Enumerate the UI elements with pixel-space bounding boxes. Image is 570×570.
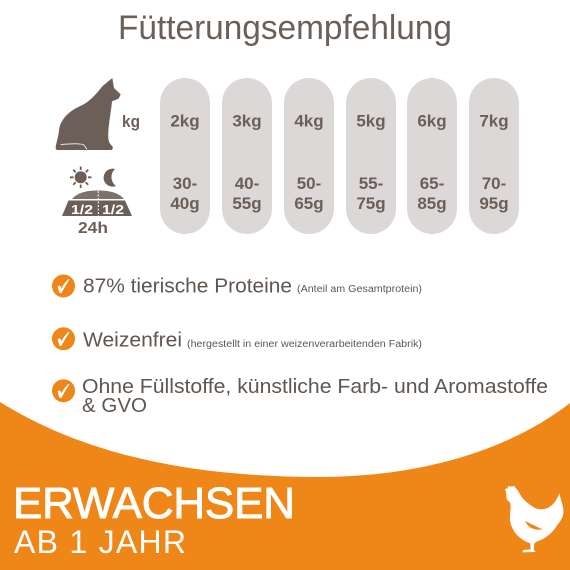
benefit: protein xyxy=(52,274,422,298)
benefit: protein: 87% tierische Proteine xyxy=(83,274,292,298)
benefit: protein: (Anteil am Gesamtprotein) xyxy=(297,284,422,295)
benefit: wheat free xyxy=(52,327,422,352)
column: 6kg: 65- xyxy=(420,174,444,193)
benefit: wheat free: (hergestellt in einer weizenverarbeitenden Fabrik) xyxy=(187,339,422,350)
orange banner xyxy=(0,402,570,570)
column: 4kg xyxy=(284,78,334,234)
column: 7kg: 7kg xyxy=(479,112,509,130)
column: 3kg: 40- xyxy=(235,174,259,193)
icon: day and night bowl xyxy=(62,166,132,217)
icon: day and night bowl: 1/2 xyxy=(102,202,124,217)
column: 2kg: 40g xyxy=(170,194,200,213)
column: 7kg: 70- xyxy=(482,174,506,193)
column: 3kg xyxy=(222,78,272,234)
column: 3kg: 55g xyxy=(232,194,262,213)
column: 5kg xyxy=(346,78,396,234)
subheading: from 1 year: AB 1 JAHR xyxy=(14,524,186,560)
column: 5kg: 5kg xyxy=(356,112,386,130)
column: 5kg: 75g xyxy=(356,194,386,213)
icon: chicken xyxy=(505,486,563,552)
column: 4kg: 50- xyxy=(297,174,321,193)
column: 2kg xyxy=(160,78,210,234)
feeding table xyxy=(160,78,519,234)
column: 7kg: 95g xyxy=(479,194,509,213)
title: Fütterungsempfehlung xyxy=(118,9,452,47)
column: 2kg: 2kg xyxy=(170,112,200,130)
icon: day and night bowl: 1/2 xyxy=(71,202,93,217)
column: 5kg: 55- xyxy=(359,174,383,193)
column: 6kg xyxy=(407,78,457,234)
benefit: no fillers: Ohne Füllstoffe, künstliche Farb- und Aromastoffe xyxy=(82,375,548,398)
column: 2kg: 30- xyxy=(173,174,197,193)
column: 6kg: 85g xyxy=(417,194,447,213)
label: 24h: 24h xyxy=(78,220,108,237)
icon: cat xyxy=(56,78,121,150)
column: 6kg: 6kg xyxy=(417,112,447,130)
benefit: no fillers: & GVO xyxy=(82,394,147,417)
column: 4kg: 65g xyxy=(294,194,324,213)
column: 7kg xyxy=(469,78,519,234)
heading: adult: ERWACHSEN xyxy=(13,479,295,528)
benefit: wheat free: Weizenfrei xyxy=(83,328,182,352)
benefit: no fillers xyxy=(52,375,548,417)
column: 3kg: 3kg xyxy=(232,112,262,130)
label: kg: kg xyxy=(122,113,140,131)
column: 4kg: 4kg xyxy=(294,112,324,130)
